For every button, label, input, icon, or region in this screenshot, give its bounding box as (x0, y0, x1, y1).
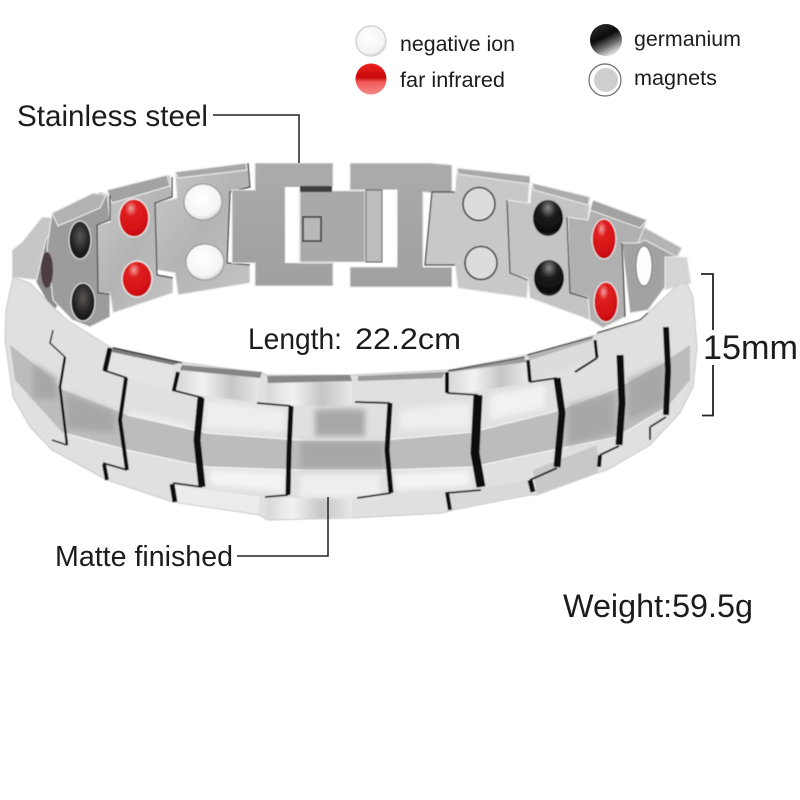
gems: left side (41, 184, 224, 321)
legend: negative ion (356, 26, 515, 56)
gems: right side (463, 188, 652, 322)
clasp: right half (350, 163, 452, 287)
leader line: stainless steel (213, 115, 299, 163)
legend: far infrared (356, 64, 505, 94)
legend: magnets (589, 64, 717, 96)
label: weight: Weight:59.5g (563, 588, 753, 624)
bracelet photo (5, 163, 697, 520)
legend: germanium (590, 24, 741, 56)
legend: magnets: magnets (634, 66, 717, 90)
front band darker stripe patches (33, 362, 665, 468)
stripe highlight edges (63, 360, 667, 470)
label: length: 22.2cm (355, 323, 461, 356)
back link shadow lines, left (97, 163, 250, 294)
back link shadow lines, right (425, 192, 625, 317)
legend: germanium: germanium (634, 27, 741, 51)
front band shading (105, 340, 598, 519)
label: length: Length: (248, 323, 342, 356)
back inner links, left side (12, 163, 250, 327)
label: matte finished: Matte finished (55, 541, 233, 573)
label: stainless steel: Stainless steel (17, 100, 208, 133)
legend: negative ion: negative ion (400, 33, 515, 56)
width bracket (701, 274, 713, 416)
front band body (5, 277, 697, 520)
black gaps between links (50, 313, 668, 510)
label: 15mm: 15mm (703, 329, 798, 367)
back inner links, right side (425, 168, 691, 328)
legend: far infrared: far infrared (400, 68, 505, 92)
link top rims (112, 337, 593, 383)
leader line: matte finished (237, 497, 328, 556)
front band centre stripe (10, 345, 690, 470)
clasp: left half (232, 163, 365, 286)
